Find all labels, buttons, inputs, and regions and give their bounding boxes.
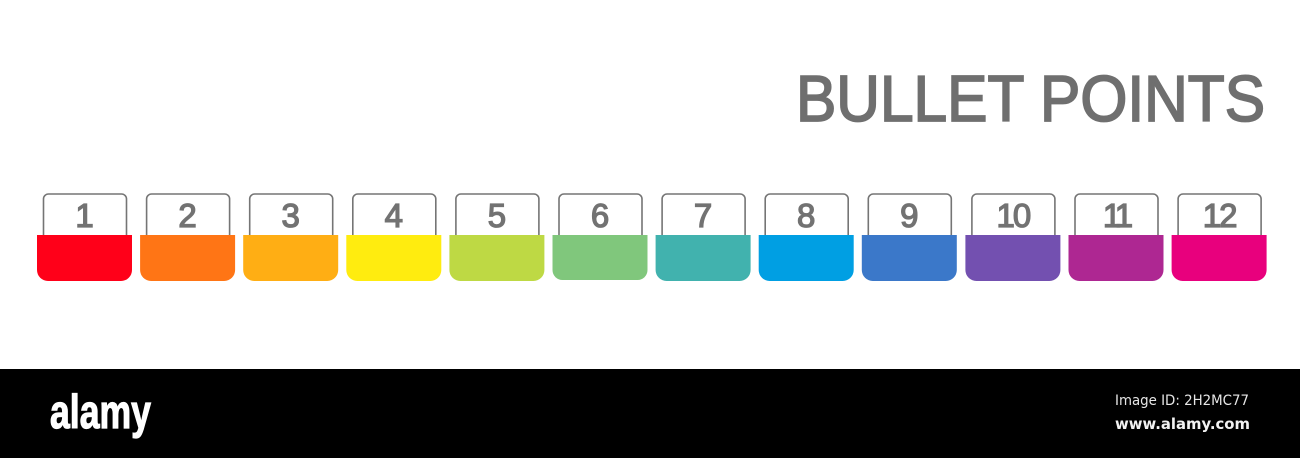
bullet 5: [449, 194, 544, 281]
bullet 7: [656, 194, 751, 281]
bullet 8: [759, 194, 854, 281]
bullet 3: 3: [282, 197, 300, 234]
bullet 10: [965, 194, 1060, 281]
bullet 11: 11: [1103, 197, 1132, 234]
website: www.alamy.com: [1115, 415, 1250, 433]
bullet 10: 10: [997, 197, 1031, 234]
bullet 4: 4: [385, 197, 403, 234]
footer band: [0, 369, 1300, 458]
bullet 7: 7: [694, 197, 712, 234]
bullet 4: [346, 194, 441, 281]
image id: Image ID: 2H2MC77: [1115, 393, 1249, 409]
title: BULLET POINTS: [796, 62, 1265, 135]
bullet 11: [1068, 194, 1164, 281]
bullet 8: 8: [797, 197, 815, 234]
bullet 5: 5: [488, 197, 506, 234]
bullet 1: 1: [75, 197, 94, 234]
bullet 2: [140, 194, 235, 281]
bullet 12: 12: [1203, 197, 1236, 234]
logo: alamy: alamy: [50, 385, 151, 438]
bullet 9: [862, 194, 957, 281]
bullet 6: 6: [591, 197, 609, 234]
bullet 2: 2: [178, 197, 197, 234]
bullet 12: [1172, 194, 1267, 281]
bullet 1: [37, 194, 132, 281]
bullet 6: [552, 194, 648, 280]
bullet 3: [243, 194, 338, 281]
bullet 9: 9: [900, 197, 918, 234]
